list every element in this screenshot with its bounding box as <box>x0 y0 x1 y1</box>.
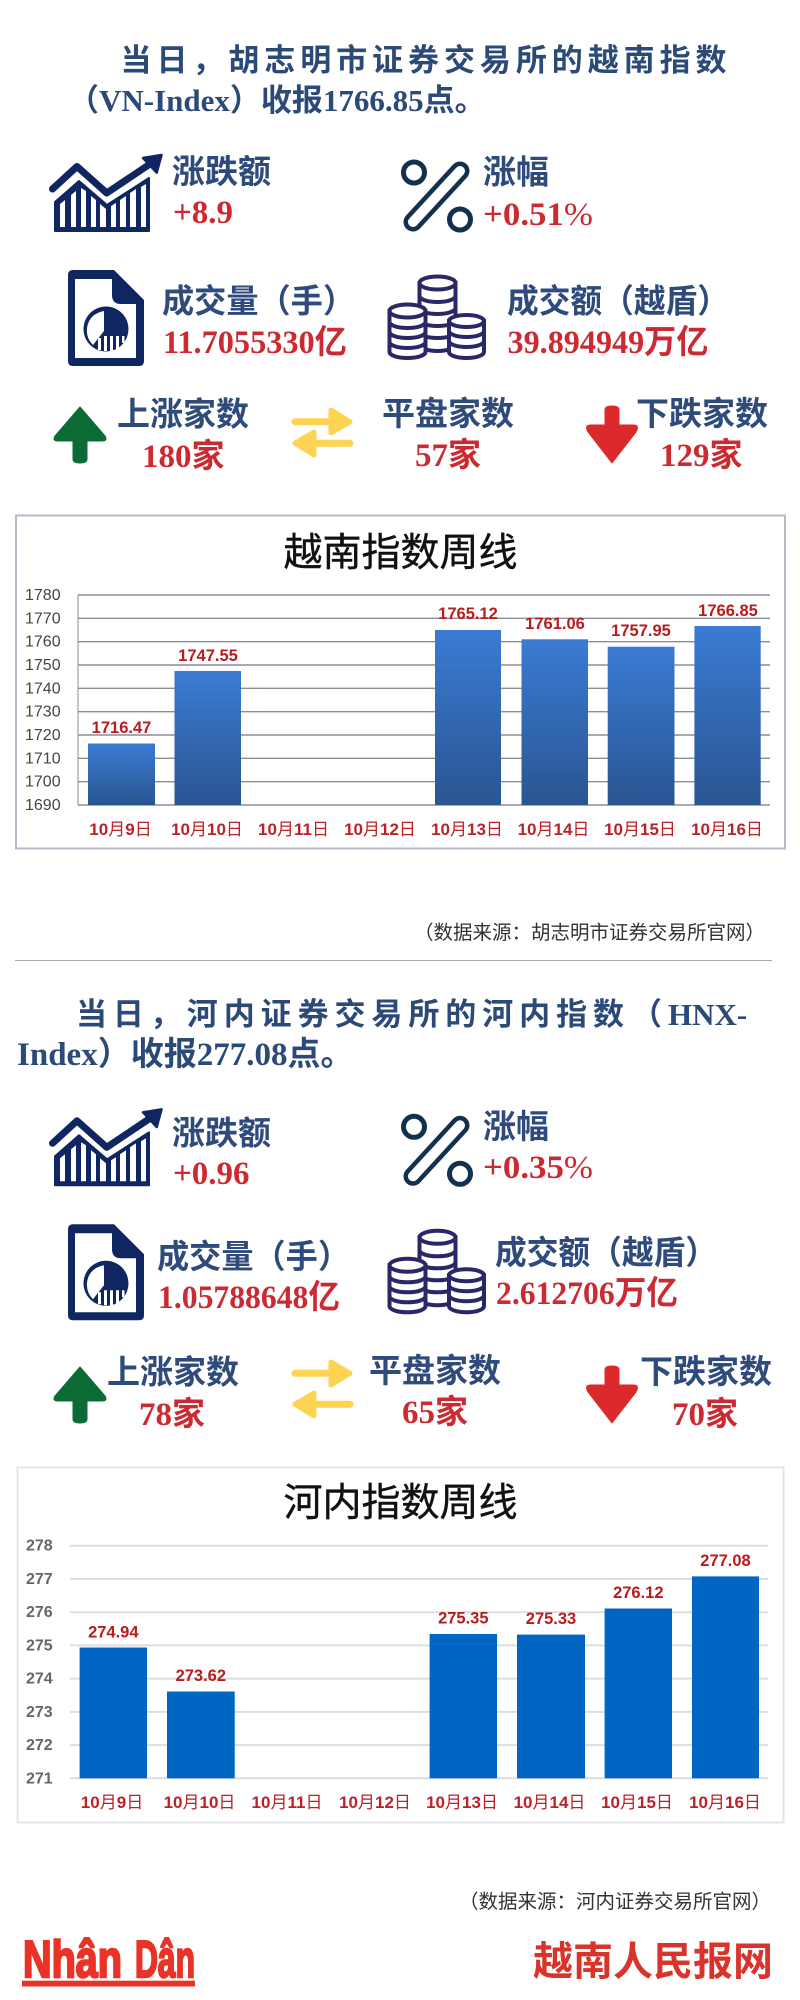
y axis labels: 1730 <box>25 704 61 721</box>
date labels: 10月13日 <box>426 1793 498 1812</box>
y axis labels <box>26 1538 53 1787</box>
value: advancers: 180家 <box>142 438 224 475</box>
value: volume: 11.7055330亿 <box>163 324 347 361</box>
value: turnover: 2.612706万亿 <box>496 1275 678 1312</box>
y axis labels: 275 <box>26 1637 53 1654</box>
bars <box>80 1576 759 1778</box>
y axis labels: 271 <box>26 1770 53 1787</box>
label: volume: 成交量（手） <box>157 1239 350 1276</box>
heading: HNX-Index close: 当日，河内证券交易所的河内指数 <box>76 997 624 1032</box>
source note: HOSE: （数据来源：胡志明市证券交易所官网） <box>414 922 765 944</box>
date labels: 10月15日 <box>601 1793 673 1812</box>
value: unchanged: 57家 <box>415 437 481 474</box>
icon: percent <box>404 1116 470 1184</box>
bars <box>88 626 761 805</box>
label: advancers: 上涨家数 <box>117 396 249 434</box>
y axis labels: 1700 <box>25 774 61 791</box>
date labels: 10月11日 <box>258 820 329 839</box>
value: volume: 1.05788648亿 <box>158 1279 340 1316</box>
label: change percent: 涨幅 <box>483 1109 549 1146</box>
section: VN-Index <box>52 43 768 475</box>
label: turnover: 成交额（越盾） <box>495 1235 717 1272</box>
label: change amount: 涨跌额 <box>172 154 271 191</box>
bar value labels: 276.12 <box>613 1584 664 1602</box>
icon: rising chart <box>52 1109 162 1185</box>
heading: VN-Index close: （VN-Index）收报1766.85点。 <box>68 83 486 118</box>
icon: document with pie <box>68 1224 144 1320</box>
date labels: 10月14日 <box>518 820 589 839</box>
heading: VN-Index close <box>68 43 726 118</box>
icon: document with pie <box>68 270 144 366</box>
y axis labels: 1740 <box>25 680 61 697</box>
date labels: 10月12日 <box>344 820 416 839</box>
y axis labels: 1690 <box>25 797 61 814</box>
value: change percent: +0.35% <box>483 1150 593 1186</box>
value: change amount: +8.9 <box>173 195 233 231</box>
panel: HNX-Index weekly chart <box>18 1468 784 1822</box>
date labels: 10月9日 <box>89 820 152 839</box>
label: turnover: 成交额（越盾） <box>507 284 729 320</box>
section: HNX-Index <box>17 997 772 1433</box>
date labels: 10月14日 <box>514 1793 585 1812</box>
bar value labels: 1765.12 <box>438 605 498 623</box>
icon: coin stacks <box>390 276 484 358</box>
icon: percent <box>404 162 470 230</box>
y axis labels: 1760 <box>25 634 61 651</box>
icon: up arrow <box>54 1367 106 1423</box>
label: unchanged: 平盘家数 <box>369 1353 501 1390</box>
heading: VN-Index close: 当日，胡志明市证券交易所的越南指数 <box>120 43 726 78</box>
y axis labels: 273 <box>26 1704 53 1721</box>
site name: 越南人民报网 <box>533 1940 773 1984</box>
icon: up arrow <box>54 407 106 463</box>
heading: HNX-Index close: HNX- <box>668 997 747 1032</box>
source note: HNX: （数据来源：河内证券交易所官网） <box>459 1891 771 1913</box>
bar value labels: 274.94 <box>88 1624 139 1642</box>
label: change amount: 涨跌额 <box>172 1116 271 1152</box>
y axis labels: 274 <box>26 1671 53 1688</box>
bar value labels: 275.33 <box>526 1610 576 1628</box>
bar value labels: 273.62 <box>176 1667 226 1685</box>
heading: HNX-Index close <box>17 997 747 1073</box>
date labels: 10月12日 <box>339 1793 411 1812</box>
bar value labels: 275.35 <box>438 1610 489 1628</box>
icon: down arrow <box>587 406 637 463</box>
label: advancers: 上涨家数 <box>107 1354 239 1392</box>
value: advancers: 78家 <box>139 1396 205 1433</box>
y axis labels: 278 <box>26 1538 53 1554</box>
icon: unchanged arrows <box>295 410 350 455</box>
heading: HNX-Index close: Index）收报277.08点。 <box>17 1036 353 1073</box>
value: unchanged: 65家 <box>402 1394 468 1431</box>
chart title: 河内指数周线 <box>284 1482 518 1525</box>
y axis labels: 276 <box>26 1604 53 1621</box>
value: change amount: +0.96 <box>173 1156 250 1192</box>
date labels: 10月16日 <box>691 820 763 839</box>
heading: HNX-Index close: （ <box>631 997 662 1032</box>
value: turnover: 39.894949万亿 <box>508 324 708 361</box>
label: decliners: 下跌家数 <box>636 396 768 433</box>
logo: Nhan Dan: Dân <box>135 1931 195 1989</box>
bar value labels: 1747.55 <box>178 647 238 665</box>
panel: VN-Index weekly chart <box>16 516 785 848</box>
y axis labels: 1750 <box>25 657 61 674</box>
bar value labels <box>88 1552 751 1685</box>
date labels: 10月9日 <box>81 1793 143 1812</box>
y axis labels: 1720 <box>25 727 61 744</box>
bar value labels: 277.08 <box>700 1552 751 1570</box>
label: decliners: 下跌家数 <box>640 1354 772 1391</box>
label: unchanged: 平盘家数 <box>382 396 514 433</box>
bar value labels: 1766.85 <box>698 602 758 620</box>
date labels: 10月15日 <box>604 820 676 839</box>
y axis labels: 277 <box>26 1571 53 1588</box>
label: volume: 成交量（手） <box>162 284 355 320</box>
bar value labels <box>92 602 758 737</box>
y axis labels <box>25 587 61 814</box>
date labels: 10月10日 <box>164 1793 235 1812</box>
value: decliners: 129家 <box>660 437 742 474</box>
label: change percent: 涨幅 <box>483 154 549 192</box>
date labels: 10月10日 <box>171 820 243 839</box>
date labels <box>89 820 763 839</box>
bar value labels: 1761.06 <box>525 615 585 633</box>
y axis labels: 1780 <box>25 587 61 604</box>
icon: rising chart <box>52 155 162 231</box>
date labels: 10月16日 <box>689 1793 761 1812</box>
value: decliners: 70家 <box>672 1396 738 1433</box>
y axis labels: 1710 <box>25 750 61 767</box>
icon: unchanged arrows <box>295 1362 350 1416</box>
date labels <box>81 1793 761 1812</box>
logo: Nhan Dan: Nhân <box>23 1931 122 1989</box>
date labels: 10月11日 <box>252 1793 322 1812</box>
y axis labels: 272 <box>26 1737 53 1754</box>
y axis labels: 1770 <box>25 610 61 627</box>
bar value labels: 1757.95 <box>611 622 671 640</box>
value: change percent: +0.51% <box>483 197 593 233</box>
chart title: 越南指数周线 <box>284 532 518 575</box>
date labels: 10月13日 <box>431 820 503 839</box>
bar value labels: 1716.47 <box>92 719 151 737</box>
icon: down arrow <box>587 1366 637 1423</box>
icon: coin stacks <box>390 1231 484 1312</box>
